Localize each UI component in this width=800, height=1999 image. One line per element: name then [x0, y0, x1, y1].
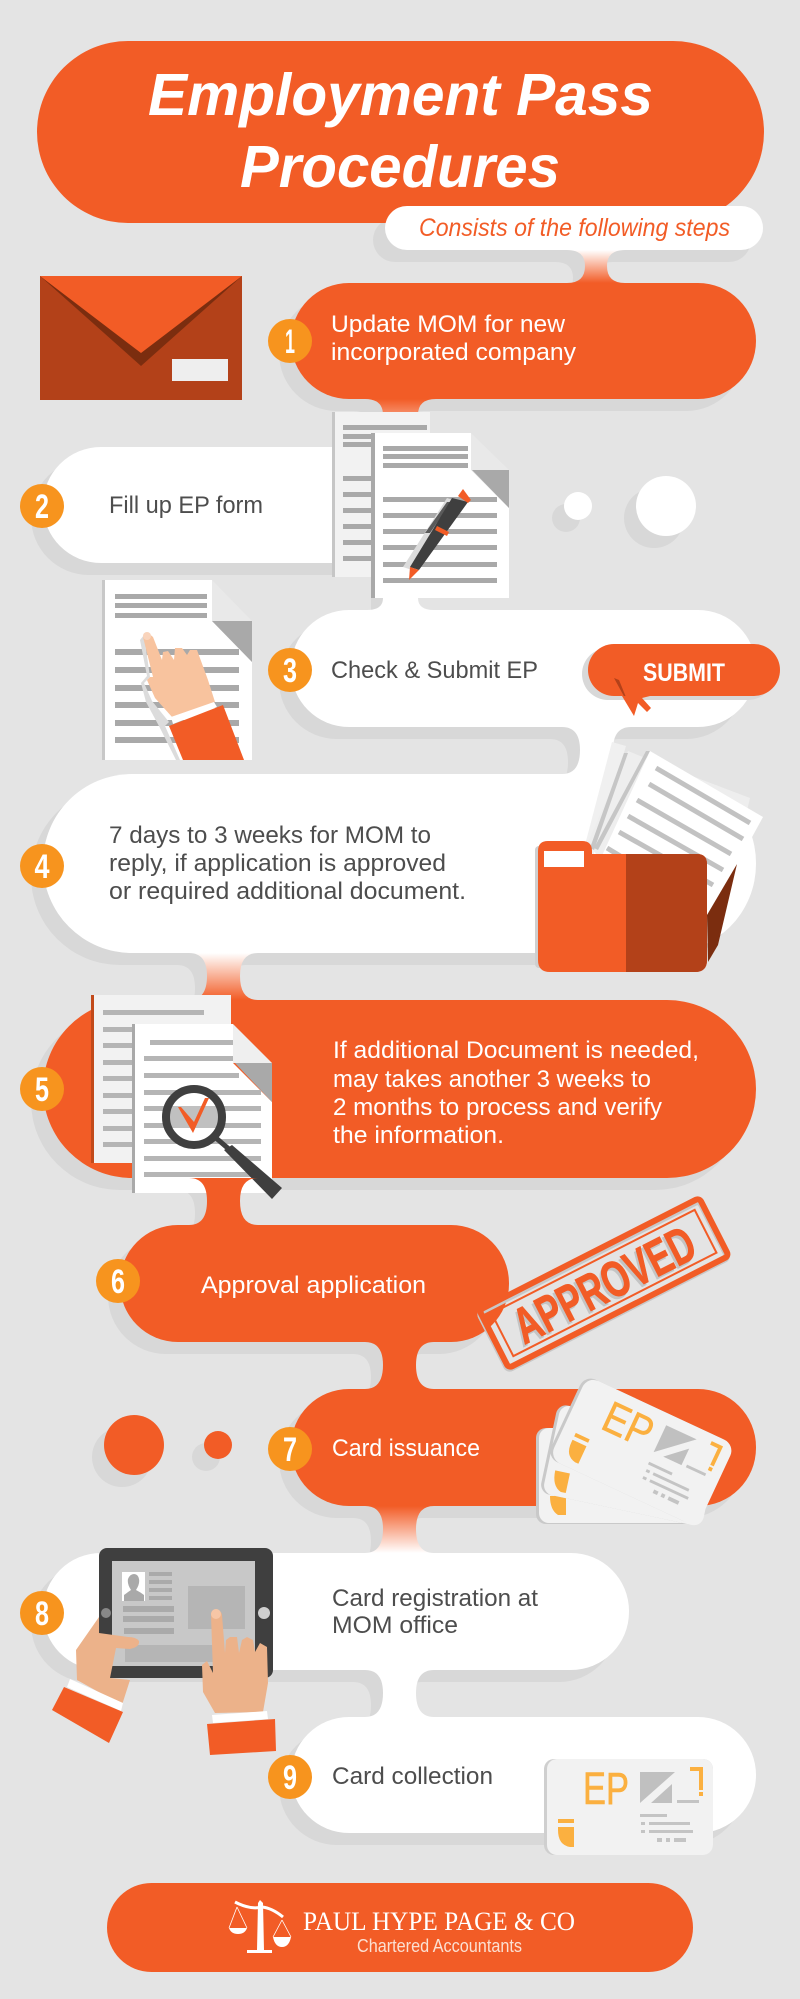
step 7 badge: 7	[283, 1431, 297, 1469]
step 5 badge: 5	[35, 1071, 49, 1109]
decorative circles: step 7	[104, 1415, 232, 1475]
step 4 text: or required additional document.	[109, 878, 466, 905]
step 4 text: reply, if application is approved	[109, 850, 446, 877]
step 6 panel	[96, 1225, 509, 1342]
icon: tablet with hands	[52, 1548, 276, 1755]
icon: submit button: SUBMIT	[643, 659, 725, 687]
icon: EP card	[544, 1759, 713, 1855]
step 7 text: Card issuance	[332, 1435, 480, 1462]
icon: fanned EP cards: EP	[595, 1393, 661, 1458]
step 9 panel	[268, 1717, 756, 1833]
icon: approved stamp	[478, 1198, 729, 1370]
step 7 panel	[268, 1389, 756, 1506]
icon: document with pointing hand	[102, 580, 252, 760]
step 8 badge	[20, 1591, 64, 1635]
connector: step 6 to step 7	[365, 1342, 434, 1389]
icon: approved stamp: APPROVED	[502, 1218, 703, 1358]
footer banner	[107, 1883, 693, 1972]
icon: fanned EP cards	[536, 1375, 735, 1527]
connector: step 8 to step 9	[365, 1670, 434, 1717]
icon: left hand	[52, 1617, 139, 1743]
title: Procedures	[240, 134, 560, 200]
step 1 panel	[268, 283, 756, 399]
connector: step 7 to step 8	[365, 1506, 434, 1553]
step 2 badge: 2	[35, 488, 49, 526]
step 5 text: the information.	[333, 1122, 504, 1149]
step 5 badge	[20, 1067, 64, 1111]
subtitle pill	[385, 206, 763, 250]
step 8 panel	[20, 1553, 629, 1670]
step 9 text: Card collection	[332, 1763, 493, 1790]
step 9 badge	[268, 1755, 312, 1799]
step 5 text: may takes another 3 weeks to	[333, 1066, 651, 1093]
step 6 badge: 6	[111, 1263, 125, 1301]
step 9 badge: 9	[283, 1759, 297, 1797]
step 1 badge	[268, 319, 312, 363]
connector: step 2 to step 3	[367, 447, 434, 610]
step 4 badge: 4	[34, 848, 50, 886]
step 3 text: Check & Submit EP	[331, 657, 538, 684]
icon: right hand	[202, 1609, 276, 1755]
connector: step 1 to step 2	[365, 399, 436, 447]
step 4 text	[109, 822, 466, 905]
icon: envelope	[40, 276, 242, 400]
icon: hand	[140, 632, 244, 760]
step 5 text: If additional Document is needed,	[333, 1037, 699, 1064]
step 2 text: Fill up EP form	[109, 492, 263, 519]
step 6 text: Approval application	[201, 1272, 426, 1299]
step 8 text: Card registration at	[332, 1585, 538, 1612]
title banner	[37, 41, 764, 223]
step 6 badge	[96, 1259, 140, 1303]
icon: scales logo	[229, 1900, 291, 1953]
subtitle pill: Consists of the following steps	[419, 214, 730, 242]
step 1 text	[331, 311, 576, 366]
icon: pen	[403, 489, 471, 580]
step 1 text: incorporated company	[331, 339, 576, 366]
step 4 text: 7 days to 3 weeks for MOM to	[109, 822, 431, 849]
icon: submit button	[582, 644, 780, 716]
step 2 badge	[20, 484, 64, 528]
step 3 badge	[268, 648, 312, 692]
step 3 panel	[268, 610, 756, 727]
connector: subtitle to step 1	[567, 250, 625, 283]
icon: EP card: EP	[583, 1763, 629, 1814]
icon: folder with papers	[535, 742, 763, 972]
icon: documents with magnifier	[91, 995, 282, 1199]
step 5 text: 2 months to process and verify	[333, 1094, 662, 1121]
step 8 text: MOM office	[332, 1612, 458, 1639]
step 4 panel	[20, 774, 756, 953]
company tagline: Chartered Accountants	[357, 1936, 522, 1956]
step 2 panel	[20, 447, 423, 563]
icon: approved stamp: APPROVED	[504, 1214, 705, 1355]
step 8 badge: 8	[35, 1595, 49, 1633]
connector: step 4 to step 5	[189, 953, 258, 1000]
icon: magnifier	[166, 1089, 282, 1199]
step 5 text	[333, 1037, 699, 1149]
step 4 badge	[20, 844, 64, 888]
icon: documents with pen	[332, 412, 509, 598]
step 1 text: Update MOM for new	[331, 311, 566, 338]
step 8 text	[332, 1585, 538, 1639]
connector: step 5 to step 6	[189, 1178, 258, 1225]
company name: PAUL HYPE PAGE & CO	[303, 1907, 575, 1936]
step 1 badge: 1	[285, 323, 295, 361]
step 7 badge	[268, 1427, 312, 1471]
title	[148, 62, 653, 200]
decorative circles: step 2	[564, 476, 696, 536]
icon: cursor	[614, 678, 651, 716]
step 5 panel	[20, 1000, 756, 1178]
title: Employment Pass	[148, 62, 653, 128]
step 3 badge: 3	[283, 652, 297, 690]
connector: step 3 to step 4	[562, 727, 631, 774]
